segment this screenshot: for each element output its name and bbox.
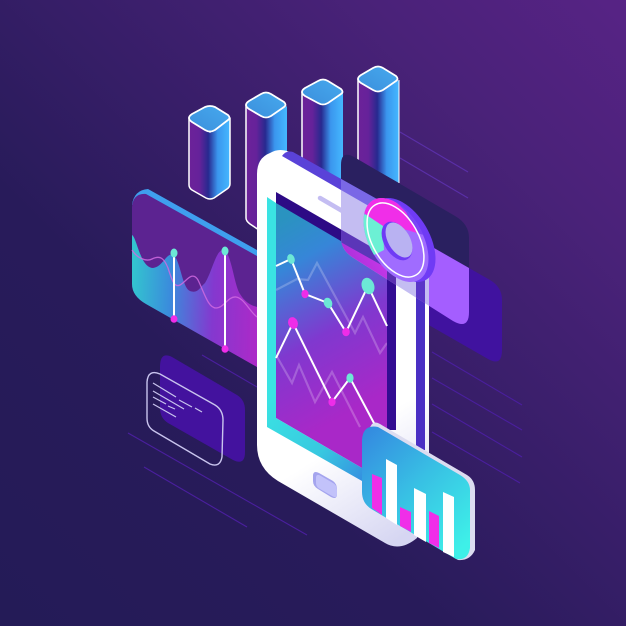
donut face: [350, 187, 442, 293]
donut segments: [364, 198, 423, 255]
panel top edge: blue: [132, 189, 257, 257]
donut hole rim: [375, 216, 419, 266]
screen: [276, 203, 387, 468]
bar 1: [189, 106, 230, 199]
bar 3: [302, 80, 343, 190]
faint diagonal floor lines: [128, 132, 522, 535]
teal side strip: [267, 197, 362, 481]
code card backing panel: [160, 355, 245, 462]
faint zigzag lines: [276, 263, 387, 427]
bar 2: [246, 92, 287, 235]
area wave: [132, 235, 257, 370]
bar 4: [358, 66, 399, 183]
panel overlap: bright violet: [429, 248, 469, 324]
bar chart card: [362, 422, 475, 560]
thin wave line: [132, 250, 257, 317]
top reflection stripe: [282, 152, 400, 224]
donut white ring: [355, 193, 436, 287]
overlay tint on phone: [341, 179, 429, 306]
code card outline: [147, 373, 223, 465]
speaker: [320, 198, 375, 230]
line chart upper: [276, 253, 387, 336]
line chart lower: [276, 316, 375, 425]
translucent panel: dark upper: [341, 155, 469, 324]
card bars: [372, 459, 454, 557]
card face: [362, 427, 470, 559]
vertical marker 1: [170, 248, 178, 323]
right columns: [387, 240, 425, 450]
card rim: [362, 422, 475, 560]
vertical marker 2: [222, 246, 228, 353]
donut hole: [380, 218, 418, 262]
code lines: [153, 383, 202, 417]
phone: [257, 150, 429, 547]
donut back rim: [357, 187, 449, 293]
left chart panel: [132, 189, 257, 370]
screen top dark strip: [276, 192, 387, 272]
panel body: [132, 194, 257, 367]
phone body: [257, 150, 429, 547]
back panel: violet: [420, 240, 502, 362]
donut chart: [364, 198, 436, 282]
home button: [313, 472, 337, 498]
